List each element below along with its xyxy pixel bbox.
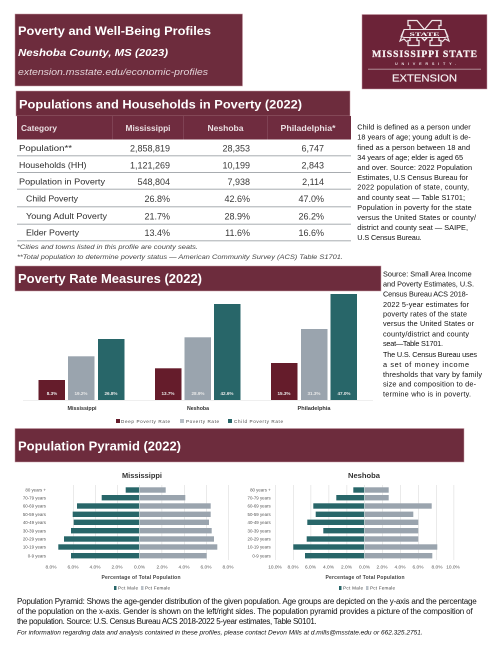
- text block: definitions and sources: 2022 population of state, county,: [357, 183, 469, 192]
- text block: definitions and sources: and over. Source: 2022 Population: [357, 163, 472, 172]
- row: population in poverty: [19, 176, 324, 187]
- text block: definitions and sources: fined as a person between 18 and: [357, 143, 470, 152]
- age labels: 30-39 years: [248, 528, 272, 533]
- row: households: Households (HH): [19, 160, 87, 170]
- row: population: 6,747: [301, 144, 324, 154]
- bars: Neshoba: 13.7%: [161, 391, 175, 396]
- row: elder poverty: 16.6%: [298, 228, 324, 238]
- percent axis: 4.0%: [395, 564, 406, 570]
- age labels: 10-19 years: [23, 545, 47, 550]
- text block: source and poverty thresholds: size and composition to de-: [383, 380, 477, 388]
- percent axis: 2.0%: [112, 564, 123, 570]
- percent axis: 8.0%: [223, 564, 234, 570]
- pyramid legend: Pct Male: [343, 586, 363, 590]
- percent axis: 10.0%: [268, 564, 283, 570]
- text block: definitions and sources: 34 years of age; elder is aged 65: [357, 153, 463, 162]
- logo: Mississippi State University Extension: [362, 14, 487, 89]
- text block: definitions and sources: Child is defined as a person under: [357, 122, 471, 132]
- text block: source and poverty thresholds: Census Bureau ACS 2018-: [383, 290, 469, 298]
- pyramid legend: [339, 586, 395, 590]
- row: young adult poverty: 26.2%: [298, 212, 324, 222]
- icon: M with state banner: STATE: [410, 32, 440, 38]
- text block: definitions and sources: [357, 122, 477, 242]
- axis title: Percentage of Total Population: [102, 575, 180, 581]
- female bars: [365, 487, 437, 558]
- female bars: [140, 487, 217, 558]
- male bars: [58, 487, 139, 558]
- age labels: [23, 488, 47, 558]
- logo university line: UNIVERSITY.: [395, 62, 456, 66]
- subtitle: county: Neshoba County, MS (2023): [18, 47, 169, 59]
- text block: population pyramid explanation: the population. Source: U.S. Census Bureau ACS 2018-2022 5-year estimates, Table S0101.: [17, 617, 317, 626]
- row: population: [19, 143, 324, 154]
- percent axis: 6.0%: [201, 564, 212, 570]
- age labels: 70-79 years: [23, 495, 47, 500]
- bars: Philadelphia: 15.3%: [277, 391, 291, 396]
- row: population in poverty: 548,804: [137, 177, 170, 187]
- percent axis: [46, 564, 234, 570]
- row: child poverty: Child Poverty: [26, 194, 79, 204]
- title: Poverty and Well-Being Profiles: [18, 26, 211, 38]
- pyramid legend: Pct Male: [118, 586, 138, 590]
- chart legend: [116, 419, 283, 424]
- percent axis: 6.0%: [305, 564, 317, 570]
- text block: definitions and sources: district and county seat — SAIPE,: [357, 223, 468, 232]
- table footnotes: *Cities and towns listed in this profile are county seats.: [17, 244, 198, 251]
- age labels: 30-39 years: [23, 528, 47, 533]
- text block: source and poverty thresholds: thresholds that vary by family: [383, 370, 482, 379]
- bars: Mississippi: 26.8%: [104, 391, 118, 396]
- section heading: population pyramid: Population Pyramid (2022): [18, 440, 181, 454]
- text block: source and poverty thresholds: Source: Small Area Income: [383, 270, 472, 278]
- age labels: 0-9 years: [28, 553, 47, 558]
- bars: Philadelphia: 47.0%: [337, 391, 351, 396]
- age labels: 70-79 years: [248, 495, 272, 500]
- logo extension: EXTENSION: [392, 74, 457, 84]
- bar chart: poverty rate measures: [23, 294, 373, 424]
- row: child poverty: [26, 194, 324, 204]
- row: households: 10,199: [222, 160, 250, 170]
- pyramid legend: [114, 586, 170, 590]
- percent axis: 4.0%: [90, 564, 101, 570]
- table header: [17, 116, 351, 140]
- chart: Mississippi population pyramid: [23, 471, 234, 590]
- age labels: 0-9 years: [252, 553, 271, 558]
- table header: Mississippi: [126, 124, 170, 133]
- table header: Neshoba: [208, 124, 244, 133]
- percent axis: 8.0%: [432, 564, 443, 570]
- bars: Mississippi: 19.2%: [74, 391, 88, 396]
- chart legend: Child Poverty Rate: [234, 419, 283, 424]
- chart: Neshoba population pyramid: [248, 471, 461, 590]
- bars: Philadelphia: Philadelphia: [298, 406, 331, 412]
- percent axis: 4.0%: [323, 564, 335, 570]
- text block: definitions and sources: 18 years of age; young adult is de-: [357, 132, 471, 142]
- age labels: 40-49 years: [248, 520, 272, 525]
- row: elder poverty: Elder Poverty: [26, 228, 80, 238]
- age labels: 10-19 years: [248, 545, 272, 550]
- text block: source and poverty thresholds: The U.S. Census Bureau uses: [383, 350, 477, 359]
- age labels: 80 years +: [25, 488, 46, 492]
- text block: source and poverty thresholds: poverty rates of the state: [383, 310, 467, 318]
- pyramid legend: Pct Female: [370, 586, 395, 590]
- text block: definitions and sources: Population in poverty for the state: [357, 203, 472, 212]
- row: population: 2,858,819: [130, 144, 170, 154]
- percent axis: 10.0%: [446, 564, 461, 570]
- age labels: 50-59 years: [23, 512, 47, 517]
- text block: source and poverty thresholds: [383, 270, 482, 398]
- chart legend: Poverty Rate: [186, 419, 219, 424]
- row: population in poverty: 2,114: [302, 177, 324, 187]
- table: poverty by area: [17, 116, 351, 241]
- text block: definitions and sources: and county seat — Table S1701;: [357, 193, 465, 202]
- percent axis: 6.0%: [413, 564, 424, 570]
- row: elder poverty: 13.4%: [144, 228, 170, 238]
- contact note: For information regarding data and analysis contained in these profiles, please contact Devon Mills at d.mills@msstate.edu or 662.325.2751.: [17, 630, 423, 636]
- row: child poverty: 47.0%: [298, 194, 324, 204]
- bars: Neshoba: [155, 304, 240, 412]
- row: households: [19, 160, 324, 170]
- percent axis: 2.0%: [341, 564, 353, 570]
- row: population: 28,353: [222, 144, 250, 154]
- row: child poverty: 42.6%: [224, 194, 250, 204]
- axis title: Percentage of Total Population: [326, 575, 404, 581]
- text block: source and poverty thresholds: and Poverty Estimates, U.S.: [383, 280, 474, 288]
- text block: population pyramid explanation: [17, 597, 477, 626]
- table footnotes: [17, 244, 343, 261]
- text block: source and poverty thresholds: a set of money income: [383, 360, 469, 369]
- row: young adult poverty: Young Adult Poverty: [26, 211, 108, 221]
- age labels: 20-29 years: [23, 537, 47, 542]
- row: child poverty: 26.8%: [144, 194, 170, 204]
- male bars: [293, 487, 364, 558]
- row: population: Population**: [19, 143, 73, 153]
- website link: extension.msstate.edu/economic-profiles: [18, 67, 209, 77]
- text block: definitions and sources: Estimates, U.S Census Bureau for: [357, 173, 469, 182]
- section heading: poverty rate measures: Poverty Rate Measures (2022): [18, 272, 202, 286]
- percent axis: 8.0%: [288, 564, 299, 570]
- pyramid legend: Pct Female: [145, 586, 170, 590]
- age labels: 60-69 years: [23, 504, 47, 509]
- row: elder poverty: [26, 228, 324, 238]
- text block: source and poverty thresholds: seat—Table S1701.: [383, 339, 443, 348]
- chart legend: Deep Poverty Rate: [121, 419, 170, 424]
- row: young adult poverty: 28.9%: [224, 212, 250, 222]
- text block: definitions and sources: versus the United States or county/: [357, 213, 477, 222]
- bars: Neshoba: 42.6%: [220, 391, 234, 396]
- section heading: population pyramid: [15, 428, 464, 462]
- bars: Neshoba: Neshoba: [187, 406, 209, 412]
- text block: definitions and sources: U.S Census Bureau.: [357, 233, 422, 242]
- text block: source and poverty thresholds: county/district and county: [383, 330, 469, 338]
- text block: population pyramid explanation: of the population on the x-axis. Gender is shown on the left/right sides. The population pyramid provides a picture of the composition of: [17, 607, 473, 616]
- row: population in poverty: Population in Poverty: [19, 176, 106, 186]
- age labels: 40-49 years: [23, 520, 47, 525]
- chart title: Neshoba: [348, 471, 381, 480]
- row: elder poverty: 11.6%: [225, 228, 250, 238]
- row: population in poverty: 7,938: [227, 177, 250, 187]
- percent axis: 6.0%: [68, 564, 79, 570]
- percent axis: 0.0%: [359, 564, 371, 570]
- percent axis: 4.0%: [179, 564, 190, 570]
- section heading: populations and households: Populations and Households in Poverty (2022): [19, 98, 302, 112]
- bars: Mississippi: [38, 339, 124, 412]
- section heading: populations and households: [16, 91, 350, 116]
- bars: Philadelphia: [271, 294, 357, 412]
- percent axis: 2.0%: [157, 564, 168, 570]
- bars: Mississippi: 8.3%: [47, 391, 57, 396]
- percent axis: 2.0%: [377, 564, 388, 570]
- age labels: 20-29 years: [248, 537, 272, 542]
- text block: source and poverty thresholds: termine who is in poverty.: [383, 390, 471, 398]
- text block: source and poverty thresholds: 2022 5-year estimates for: [383, 300, 470, 309]
- header panel: [15, 14, 242, 86]
- percent axis: 8.0%: [46, 564, 57, 570]
- age labels: 80 years +: [250, 488, 271, 492]
- row: young adult poverty: 21.7%: [144, 212, 170, 222]
- logo wordmark: MISSISSIPPI STATE: [372, 49, 477, 60]
- row: households: 2,843: [301, 160, 324, 170]
- bars: Mississippi: Mississippi: [68, 406, 97, 412]
- chart title: Mississippi: [122, 471, 162, 480]
- age labels: [248, 488, 272, 558]
- age labels: 60-69 years: [248, 504, 272, 509]
- text block: source and poverty thresholds: versus the United States or: [383, 319, 475, 328]
- section heading: poverty rate measures: [15, 266, 381, 291]
- table footnotes: **Total population to determine poverty status — American Community Survey (ACS) Table S1701.: [17, 254, 343, 261]
- table header: Category: [21, 124, 57, 133]
- percent axis: 0.0%: [134, 564, 146, 570]
- bars: Neshoba: 28.9%: [191, 391, 205, 396]
- row: households: 1,121,269: [130, 160, 170, 170]
- percent axis: [268, 564, 461, 570]
- table header: Philadelphia*: [280, 124, 336, 133]
- age labels: 50-59 years: [248, 512, 272, 517]
- text block: population pyramid explanation: Population Pyramid: Shows the age-gender distribution of the given population. Age groups are depicted on the y-axis and the percentage: [17, 597, 477, 606]
- row: young adult poverty: [26, 211, 324, 222]
- bars: Philadelphia: 31.3%: [307, 391, 321, 396]
